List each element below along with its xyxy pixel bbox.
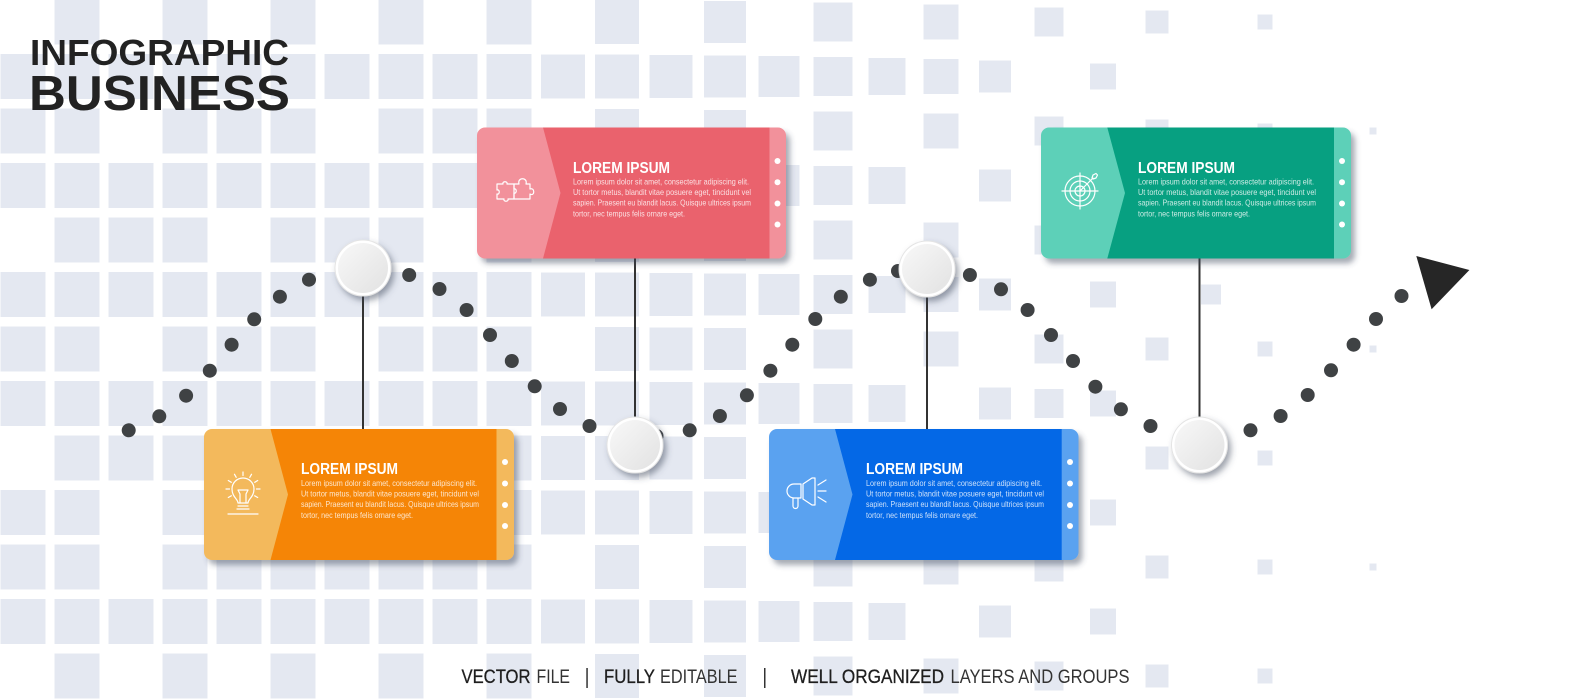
body text: tortor, nec tempus felis ornare eget. (866, 510, 978, 520)
heading: LOREM IPSUM (1138, 160, 1235, 177)
body text: Ut tortor metus, blandit vitae posuere eget, tincidunt vel (301, 489, 479, 499)
body text: sapien. Praesent eu blandit lacus. Quisque ultrices ipsum (573, 198, 751, 208)
title (29, 32, 290, 121)
heading: LOREM IPSUM (866, 461, 963, 478)
heading: LOREM IPSUM (301, 461, 398, 478)
body text: Ut tortor metus, blandit vitae posuere eget, tincidunt vel (1138, 187, 1316, 197)
icon: light bulb (226, 472, 260, 514)
body text (1138, 176, 1316, 218)
body text: Lorem ipsum dolor sit amet, consectetur adipiscing elit. (573, 176, 749, 186)
body text: sapien. Praesent eu blandit lacus. Quisque ultrices ipsum (301, 499, 479, 509)
body text (573, 176, 751, 218)
icon: puzzle (497, 179, 534, 201)
body text: tortor, nec tempus felis ornare eget. (301, 510, 413, 520)
body text (866, 478, 1044, 520)
body text: Lorem ipsum dolor sit amet, consectetur adipiscing elit. (1138, 176, 1314, 186)
body text: tortor, nec tempus felis ornare eget. (573, 208, 685, 218)
dotted wave path (122, 264, 1409, 443)
body text: Lorem ipsum dolor sit amet, consectetur adipiscing elit. (301, 478, 477, 488)
panel: orange card (204, 429, 514, 560)
body text: sapien. Praesent eu blandit lacus. Quisque ultrices ipsum (866, 499, 1044, 509)
panel: green card (1041, 128, 1351, 258)
panel: blue card (769, 429, 1078, 560)
body text: tortor, nec tempus felis ornare eget. (1138, 208, 1250, 218)
body text (301, 478, 479, 520)
footer tagline: FULLY (604, 667, 655, 688)
footer tagline: VECTOR (462, 667, 530, 688)
heading: LOREM IPSUM (573, 160, 670, 177)
footer tagline: EDITABLE (660, 667, 738, 688)
footer tagline: LAYERS AND GROUPS (950, 667, 1130, 688)
footer tagline (462, 667, 1130, 688)
footer tagline: WELL ORGANIZED (791, 667, 944, 688)
panel: red card (477, 128, 786, 258)
title: INFOGRAPHIC (30, 32, 289, 73)
footer tagline: FILE (536, 667, 570, 688)
connector lines (363, 258, 1200, 430)
node circles (334, 240, 1228, 474)
body text: Lorem ipsum dolor sit amet, consectetur adipiscing elit. (866, 478, 1042, 488)
body text: sapien. Praesent eu blandit lacus. Quisque ultrices ipsum (1138, 198, 1316, 208)
body text: Ut tortor metus, blandit vitae posuere eget, tincidunt vel (866, 489, 1044, 499)
title: BUSINESS (29, 67, 290, 121)
body text: Ut tortor metus, blandit vitae posuere eget, tincidunt vel (573, 187, 751, 197)
icon: target (1062, 173, 1098, 209)
icon: megaphone (787, 478, 826, 509)
arrow head (1416, 256, 1469, 309)
